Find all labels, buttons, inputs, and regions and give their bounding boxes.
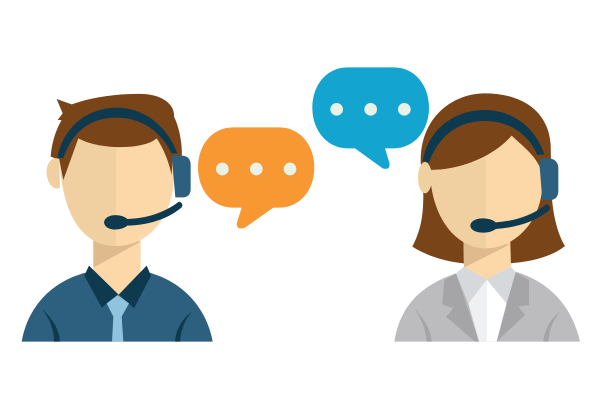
female neck shadow xyxy=(463,238,510,268)
female blouse right xyxy=(487,279,507,342)
male headband xyxy=(57,108,177,158)
male ear xyxy=(47,158,60,188)
male collar xyxy=(84,266,151,308)
female jacket xyxy=(394,272,580,342)
female lapels xyxy=(442,272,529,342)
female ear xyxy=(418,162,432,193)
female face xyxy=(430,136,542,248)
female headband xyxy=(423,110,544,162)
male face shaded half xyxy=(59,135,116,246)
speech bubble: orange xyxy=(198,127,314,229)
speech bubble: blue xyxy=(312,67,429,169)
female jacket creases xyxy=(414,308,560,342)
female microphone xyxy=(470,204,550,233)
male face xyxy=(59,135,174,246)
male neck xyxy=(93,232,141,295)
female face shaded half xyxy=(430,158,486,248)
female collar xyxy=(456,267,516,303)
male tie xyxy=(107,295,129,342)
male shirt creases xyxy=(42,308,192,342)
male microphone xyxy=(104,202,182,230)
female blouse xyxy=(468,279,487,342)
figure: female agent xyxy=(394,93,580,342)
male earpiece xyxy=(172,156,191,197)
orange bubble dots xyxy=(216,163,296,175)
female earpiece xyxy=(539,158,558,200)
male shirt xyxy=(22,272,213,342)
female hair xyxy=(412,93,565,263)
blue bubble dots xyxy=(330,103,411,116)
male hair xyxy=(51,94,182,180)
figure: male agent xyxy=(22,94,213,342)
female neck xyxy=(463,232,511,279)
male neck shadow xyxy=(93,235,141,268)
